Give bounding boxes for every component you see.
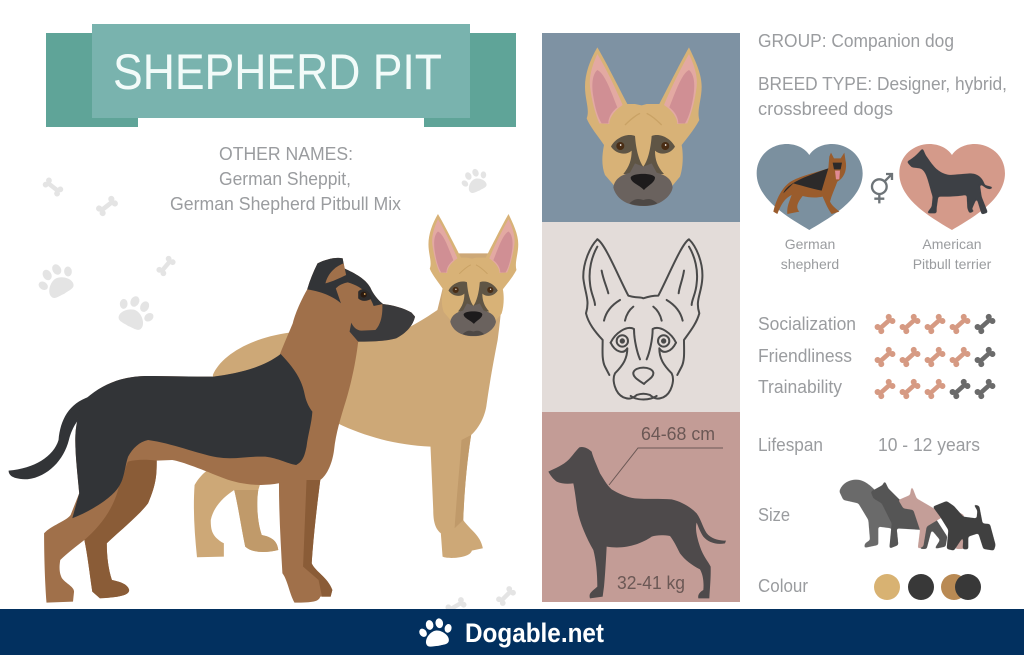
- icon: male-female symbol: [872, 174, 892, 203]
- panel: dog face colour: [542, 33, 740, 222]
- title banner: [46, 24, 516, 127]
- group and breed type text: [758, 31, 1007, 119]
- rating: trainability: [758, 377, 997, 400]
- parent breed labels: American: [922, 236, 982, 252]
- dog silhouette: [548, 447, 726, 598]
- tail: [9, 397, 90, 479]
- colour swatches: [874, 574, 981, 600]
- lifespan: 10 - 12 years: [878, 435, 980, 455]
- body: [44, 258, 415, 603]
- illustration: brown and black pitbull in front: [9, 258, 415, 603]
- dark brown hind leg: [84, 460, 157, 598]
- size row: Size: [758, 505, 790, 525]
- rating: socialization: [758, 313, 997, 335]
- icon: paw logo: [416, 616, 456, 649]
- icon: line-art dog head: [583, 239, 702, 399]
- parent breed labels: German: [785, 236, 835, 252]
- heart: German shepherd: [757, 144, 863, 230]
- colour row: Colour: [758, 576, 808, 596]
- group and breed type text: GROUP: Companion dog: [758, 31, 954, 51]
- colour row: [758, 574, 981, 600]
- other names text: OTHER NAMES:: [219, 144, 353, 164]
- parent breed labels: [781, 236, 992, 272]
- footer bar: [0, 609, 1024, 655]
- rating: friendliness: [758, 346, 997, 368]
- heart: American Pitbull terrier: [899, 144, 1005, 230]
- size silhouettes: [839, 480, 996, 551]
- group and breed type text: crossbreed dogs: [758, 99, 893, 119]
- parent breed labels: Pitbull terrier: [913, 256, 992, 272]
- other names text: [170, 144, 401, 214]
- illustration: tan German shepherd behind: [194, 214, 518, 558]
- panel: size and weight silhouette: [542, 412, 740, 602]
- background paws and bones: [32, 165, 517, 616]
- black saddle: [72, 354, 312, 518]
- icon: tan dog head: [585, 47, 702, 206]
- ratings: [758, 313, 997, 400]
- other names text: German Shepherd Pitbull Mix: [170, 194, 401, 214]
- head markings: [307, 258, 383, 306]
- other names text: German Sheppit,: [219, 169, 351, 189]
- size row: [758, 480, 996, 551]
- parent breeds hearts: [757, 144, 1005, 230]
- footer brand name: Dogable.net: [465, 618, 604, 648]
- rating: socialization: Socialization: [758, 314, 856, 334]
- rating: trainability: Trainability: [758, 377, 842, 397]
- weight label: 32-41 kg: [617, 573, 685, 593]
- parent breed labels: shepherd: [781, 256, 839, 272]
- lifespan: [758, 435, 980, 455]
- group and breed type text: BREED TYPE: Designer, hybrid,: [758, 74, 1007, 94]
- height label: 64-68 cm: [641, 424, 715, 444]
- rating: friendliness: Friendliness: [758, 346, 852, 366]
- height leader line: [609, 448, 723, 485]
- title: SHEPHERD PIT: [113, 44, 442, 100]
- panel: dog face outline: [542, 222, 740, 412]
- lifespan: Lifespan: [758, 435, 823, 455]
